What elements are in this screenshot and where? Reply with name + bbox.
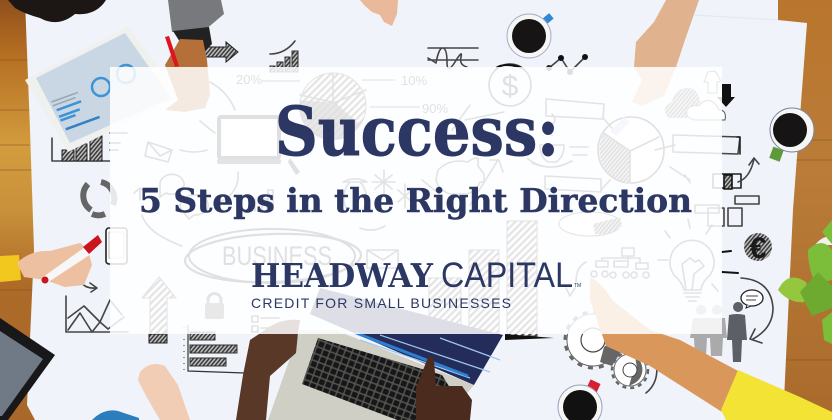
icon: upward arrows	[422, 105, 504, 205]
icon: small hand-drawn notes	[110, 133, 273, 219]
icon: flat pie	[559, 212, 622, 236]
logo trademark: TM	[574, 283, 581, 289]
icon: euro sign: €	[750, 232, 767, 265]
subtitle: 5 Steps in the Right Direction	[139, 181, 692, 220]
icon: speech bubble	[741, 290, 763, 308]
person: hair top left	[8, 0, 106, 22]
person: right arm with yellow sleeve	[590, 278, 832, 420]
icon: euro sign	[744, 232, 772, 265]
icon: dollar coin	[489, 64, 531, 106]
icon: black down arrow	[717, 84, 735, 107]
coffee cup top	[507, 13, 554, 58]
person: top hand at centre	[360, 0, 398, 26]
laptop	[268, 288, 554, 420]
icon: coffee cup sketch	[528, 114, 588, 167]
icon: recycle arrows	[83, 182, 114, 215]
icon: envelope	[145, 142, 172, 162]
icon: phone	[106, 228, 127, 264]
icon: flowchart boxes	[545, 99, 759, 226]
person: marker hand left	[0, 235, 102, 287]
icon: piggy bank	[436, 158, 484, 194]
icon: large pie	[598, 117, 675, 183]
percent labels	[236, 72, 448, 116]
person: bottom hand and blue cap	[92, 364, 190, 420]
icon: org chart	[566, 248, 649, 296]
icon: horizontal bar chart	[184, 316, 279, 373]
logo word: Headway: HEADWAY	[251, 256, 433, 295]
plant	[778, 220, 832, 344]
icon: laptop sketch	[180, 82, 300, 175]
icon: up arrow sketch	[704, 71, 721, 93]
icon: clouds	[665, 88, 725, 120]
icon: people	[690, 302, 747, 362]
tablet top left	[25, 26, 180, 152]
logo tagline: CREDIT FOR SMALL BUSINESSES	[251, 295, 511, 311]
person: dark arm left of laptop	[236, 320, 300, 420]
icon: envelope lower	[367, 250, 398, 268]
icon: zigzag line chart	[66, 296, 128, 332]
person: top centre hand with watch and pen	[165, 0, 224, 112]
person: dark hand on laptop	[416, 356, 472, 420]
title: Success: Success:	[275, 92, 559, 171]
icon: line squiggle chart	[428, 48, 478, 68]
icon: small rising bar chart	[270, 41, 298, 72]
icon: dot line chart	[546, 54, 588, 75]
coffee cup bottom	[558, 379, 602, 420]
sketch icons on paper	[52, 41, 773, 393]
icon: curved arrow near hand	[80, 280, 97, 292]
icon: curved person arrow	[741, 278, 773, 343]
percent labels: 20%	[236, 72, 262, 87]
icon: dollar coin: $	[502, 70, 519, 103]
person: top right hand	[632, 0, 699, 106]
translucent title panel	[110, 67, 722, 334]
icon: padlock	[205, 294, 224, 319]
logo word: Capital: CAPITAL	[441, 256, 573, 295]
icon: business oval	[142, 215, 385, 285]
icon: dark arrow	[205, 42, 238, 62]
icon: pie chart sketch	[299, 73, 366, 140]
coffee cup right	[769, 108, 814, 162]
percent labels: 10%	[401, 73, 427, 88]
icon: tall hatched bars	[429, 221, 537, 336]
icon: gears	[565, 312, 657, 393]
icon: big up arrow	[142, 277, 176, 343]
icon: light bulb	[658, 219, 738, 301]
logo: Headway Capital	[251, 256, 581, 311]
icon: money bag and stars	[343, 170, 412, 208]
icon: business oval: BUSINESS	[222, 241, 332, 271]
icon: left bar chart	[52, 136, 110, 161]
dark tablet bottom left	[0, 318, 55, 420]
percent labels: 90%	[422, 101, 448, 116]
icon: curved arrow	[738, 158, 759, 182]
